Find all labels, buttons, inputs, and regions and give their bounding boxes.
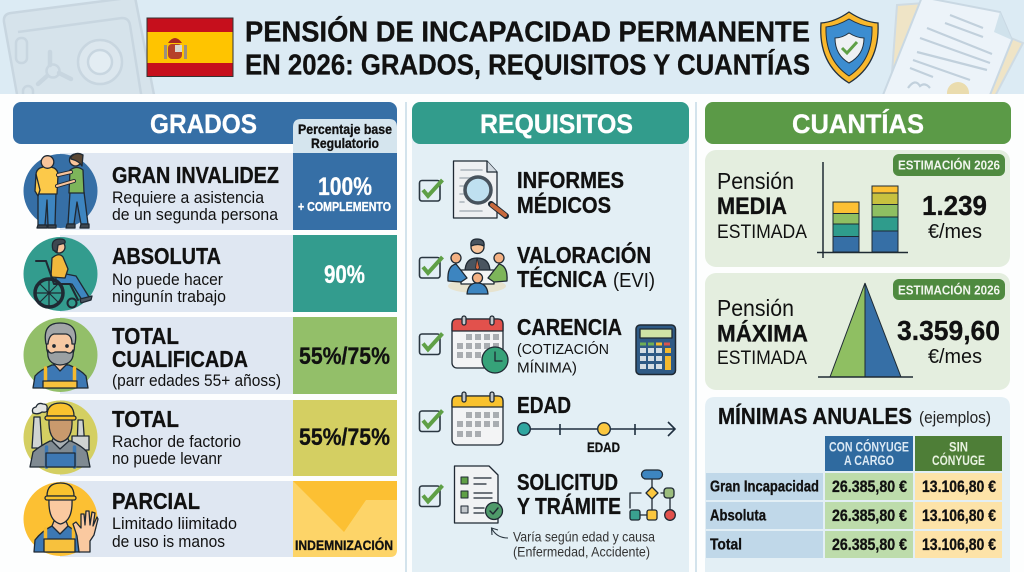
icon: checklist: [454, 466, 502, 523]
percentage: 90%: 90%: [324, 261, 365, 289]
row: total: [24, 400, 397, 476]
card: pensión máxima: ESTIMADA: [717, 348, 807, 369]
icon: person assisting: [24, 153, 98, 228]
card: pensión media: 1.239: [922, 190, 987, 221]
icon: flowchart: [630, 470, 675, 520]
mínimas heading: MÍNIMAS ANUALES: [718, 402, 912, 429]
icon: checkbox: [420, 334, 442, 354]
requirement: valoración técnica: TÉCNICA: [517, 265, 607, 292]
requirement: informes médicos: MÉDICOS: [517, 191, 611, 218]
row: absoluta: [24, 235, 397, 312]
row: gran invalidez: GRAN INVALIDEZ: [112, 162, 279, 188]
note: age and cause: Varía según edad y causa: [513, 528, 655, 544]
grados heading: [13, 102, 397, 144]
cuantías heading: [705, 102, 1011, 144]
requirement: valoración técnica: VALORACIÓN: [517, 241, 651, 268]
requirement: carencia: CARENCIA: [517, 314, 622, 340]
badge: [893, 279, 1005, 300]
percentage: indemnización: INDEMNIZACIÓN: [295, 538, 393, 553]
badge: ESTIMACIÓN 2026: [898, 158, 1000, 172]
requirement: informes médicos: [420, 161, 624, 218]
icon: document with magnifier: [454, 161, 506, 218]
table row: total: Total: [710, 536, 742, 554]
panel: mínimas anuales: [705, 397, 1010, 572]
panel: requisitos: [405, 102, 697, 572]
row: total cualificada: CUALIFICADA: [112, 346, 248, 372]
row: parcial: [24, 481, 397, 557]
icon: older worker: [24, 318, 98, 392]
timeline arrow: EDAD: [587, 440, 620, 455]
requirement: valoración técnica: [420, 239, 655, 294]
row: absoluta: ningunín trabajo: [112, 288, 226, 306]
row: parcial: de uso is manos: [112, 533, 225, 551]
panel: grados: [13, 102, 397, 557]
icon: checkbox: [420, 257, 442, 278]
icon: checkbox: [420, 180, 442, 201]
badge: ESTIMACIÓN 2026: [898, 282, 1000, 298]
requirement: valoración técnica: (EVI): [613, 270, 655, 292]
percentage: 55%/75% qualified: 55%/75%: [299, 343, 390, 370]
card: pensión media: ESTIMADA: [717, 222, 807, 243]
title: PENSIÓN DE INCAPACIDAD PERMANENTE: [245, 14, 810, 48]
row: gran invalidez: Requiere a asistencia: [112, 189, 265, 207]
icon: wheelchair user: [24, 237, 98, 311]
header band: [0, 0, 1024, 94]
card: pensión media: MEDIA: [717, 193, 787, 220]
icon: calculator: [636, 325, 676, 374]
column head: con cónyuge: [825, 436, 913, 471]
percentage: 100%: [293, 153, 397, 230]
column head: sin cónyuge: CÓNYUGE: [932, 453, 985, 468]
row: total: no puede levanr: [112, 450, 222, 468]
table row: total: 26.385,80 €: [832, 536, 907, 554]
percentage: 100%: 100%: [318, 173, 372, 201]
note: age and cause: [492, 528, 655, 560]
row: gran invalidez: de un segunda persona: [112, 206, 279, 224]
requirement: carencia: [420, 314, 676, 376]
requirement: edad: EDAD: [517, 392, 571, 418]
row: absoluta: ABSOLUTA: [112, 243, 221, 269]
icon: background safe: [2, 0, 155, 94]
card: pensión máxima: Pensión: [717, 295, 794, 321]
row: total: Rachor de factorio: [112, 433, 241, 451]
icon: yellow calendar: [452, 392, 503, 445]
icon: shield: [821, 12, 878, 83]
row: total cualificada: (parr edades 55+ añoss): [112, 372, 281, 390]
requirement: edad: [420, 392, 675, 455]
table row: absoluta: 26.385,80 €: [832, 507, 907, 525]
column head: con cónyuge: CON CÓNYUGE: [829, 440, 909, 454]
card: pensión media: [705, 150, 1010, 267]
card: pensión máxima: €/mes: [928, 346, 982, 368]
requisitos heading: [412, 102, 689, 144]
row: parcial: PARCIAL: [112, 488, 200, 514]
column head: sin cónyuge: [915, 436, 1002, 471]
table row: gran incapacidad: [706, 473, 1002, 500]
table row: total: [706, 531, 1002, 558]
requirement: solicitud y trámite: [420, 466, 675, 523]
bar chart: [817, 162, 908, 258]
table row: absoluta: [706, 502, 1002, 529]
percentage column heading: Regulatorio: [311, 135, 379, 151]
icon: factory worker: [24, 400, 98, 474]
table row: gran incapacidad: 26.385,80 €: [832, 478, 907, 496]
requirement: solicitud y trámite: Y TRÁMITE: [517, 492, 621, 519]
row: total: TOTAL: [112, 406, 179, 432]
requisitos heading: REQUISITOS: [480, 109, 633, 139]
percentage: indemnización: [293, 481, 397, 557]
title: EN 2026: GRADOS, REQUISITOS Y CUANTÍAS: [245, 48, 810, 82]
table row: absoluta: 13.106,80 €: [922, 507, 996, 525]
table row: total: 13.106,80 €: [922, 536, 996, 554]
icon: calendar with clock: [452, 316, 508, 373]
requirement: informes médicos: INFORMES: [517, 167, 624, 193]
card: pensión máxima: MÁXIMA: [717, 320, 808, 348]
table: [706, 436, 1002, 558]
percentage column heading: [293, 119, 397, 153]
requirement: carencia: MÍNIMA): [517, 360, 577, 376]
icon: assessment meeting: [448, 239, 507, 294]
note: age and cause: (Enfermedad, Accidente): [513, 544, 650, 560]
mínimas heading: (ejemplos): [919, 408, 991, 427]
icon: checkbox: [420, 410, 442, 432]
card: pensión media: €/mes: [928, 221, 982, 243]
row: total cualificada: TOTAL: [112, 323, 179, 349]
title: [245, 14, 810, 82]
percentage: 55%/75%: [293, 400, 397, 476]
row: gran invalidez: [24, 153, 397, 230]
card: pensión media: Pensión: [717, 168, 794, 194]
table row: gran incapacidad: Gran Incapacidad: [710, 478, 819, 496]
icon: background documents: [881, 0, 1023, 104]
requirement: solicitud y trámite: SOLICITUD: [517, 469, 618, 495]
table row: gran incapacidad: 13.106,80 €: [922, 478, 996, 496]
badge: [893, 154, 1005, 176]
panel: cuantías: [705, 102, 1011, 572]
timeline arrow: [518, 422, 675, 455]
requirement: carencia: (COTIZACIÓN: [517, 341, 609, 358]
table row: absoluta: Absoluta: [710, 508, 766, 524]
card: pensión máxima: 3.359,60: [897, 315, 1000, 346]
grados heading: GRADOS: [150, 109, 257, 139]
column head: sin cónyuge: SIN: [949, 440, 968, 454]
percentage: 90%: [293, 235, 397, 312]
cuantías heading: CUANTÍAS: [792, 108, 924, 139]
row: absoluta: No puede hacer: [112, 271, 223, 289]
row: parcial: Limitado liimitado: [112, 515, 237, 533]
percentage: 55%/75% qualified: [293, 317, 397, 394]
icon: Spanish flag: [147, 18, 233, 76]
card: pensión máxima: [705, 273, 1010, 390]
column head: con cónyuge: A CARGO: [844, 453, 894, 468]
icon: worker raising hand: [24, 482, 98, 556]
percentage: 100%: + COMPLEMENTO: [298, 200, 391, 214]
triangle chart: [818, 283, 913, 377]
percentage: 55%/75%: 55%/75%: [299, 424, 390, 451]
icon: checkbox: [420, 486, 442, 506]
percentage column heading: Percentaje base: [298, 121, 392, 137]
row: total cualificada: [24, 317, 397, 394]
